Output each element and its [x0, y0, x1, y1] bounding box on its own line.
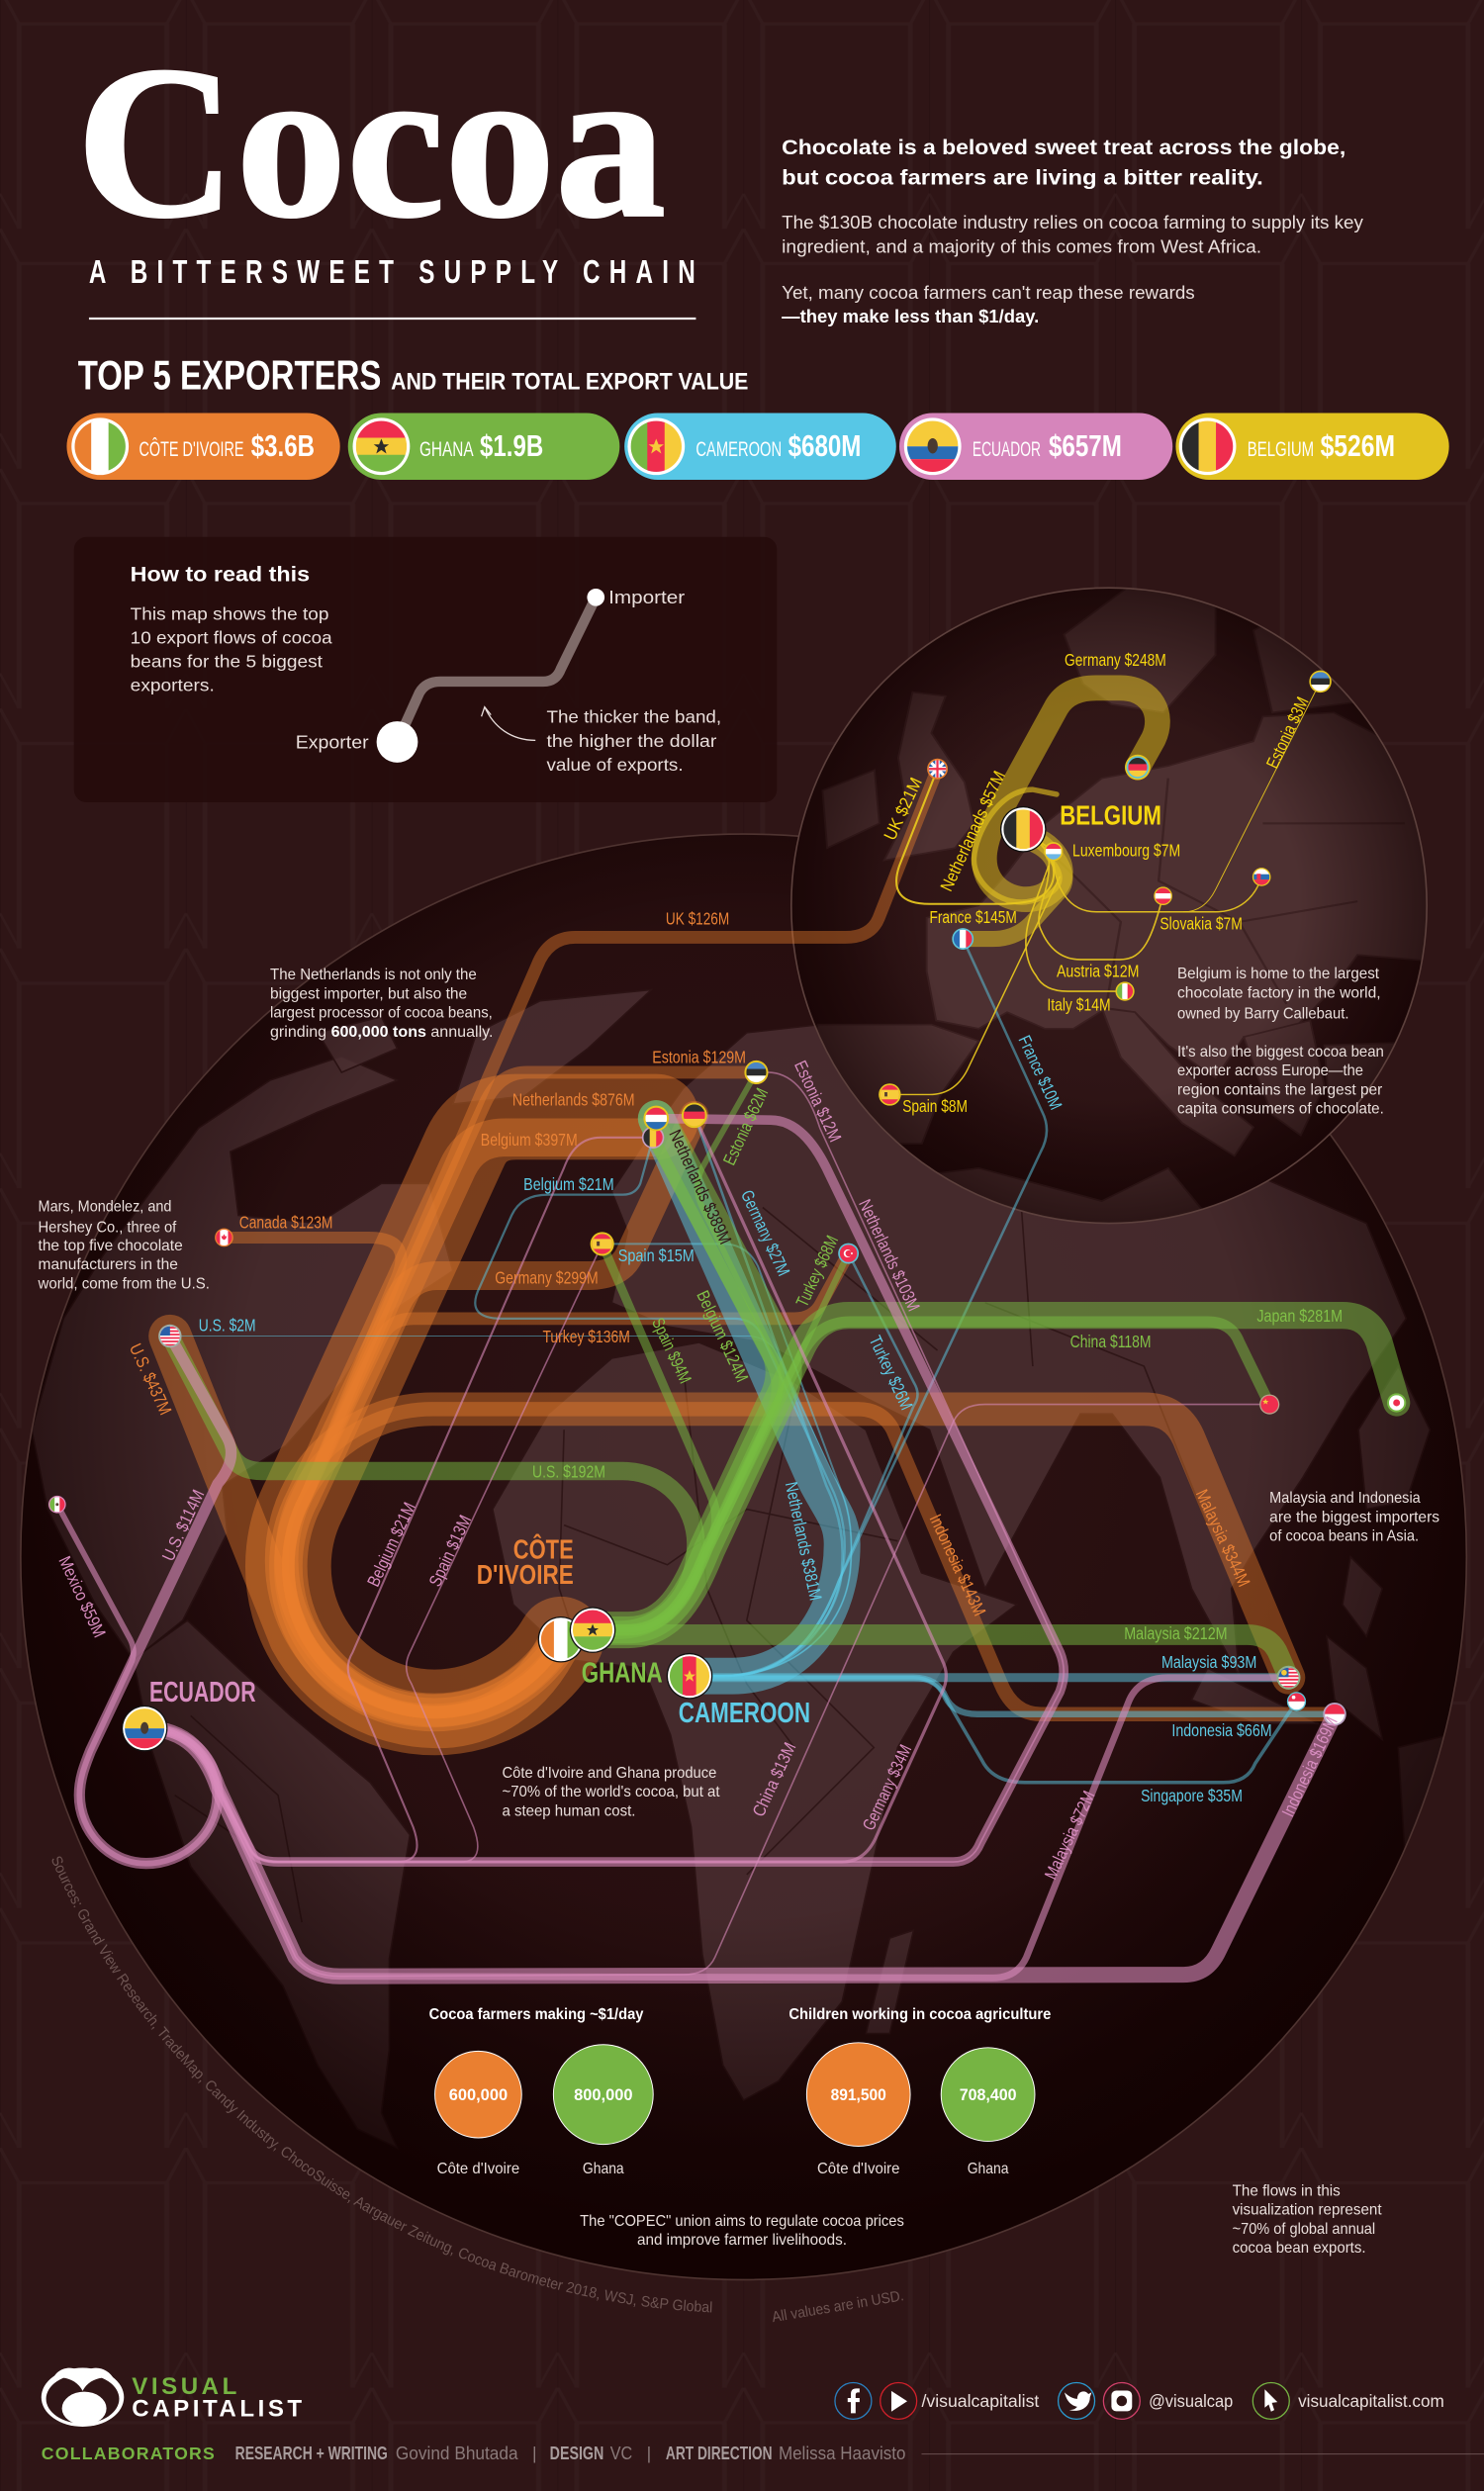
flow: Cameroon to Turkey [690, 1253, 917, 1676]
flow labels: Belgium inset: Estonia $3M [1262, 693, 1313, 772]
flag: Côte d'Ivoire exporter [538, 1616, 584, 1663]
exporter name labels: D'IVOIRE [477, 1559, 574, 1590]
flow labels: Ghana: Estonia $62M [719, 1085, 772, 1168]
flow: Belgium to Spain [889, 876, 1060, 1094]
flag: France inset [952, 928, 974, 950]
flags: importers in Europe inset [879, 671, 1332, 1106]
flow: Ghana to Japan [593, 1316, 1397, 1630]
callout: Netherlands note: The Netherlands is not only the [270, 966, 477, 983]
flow: Cameroon to Indonesia [690, 1678, 1335, 1714]
credits: COLLABORATORS [42, 2444, 215, 2463]
flow labels: Ecuador: Belgium $21M [363, 1499, 419, 1590]
flag: Luxembourg inset [1044, 842, 1063, 861]
subtitle: A BITTERSWEET SUPPLY CHAIN [89, 253, 696, 291]
flow: Ecuador to Netherlands [144, 1119, 1064, 1862]
sources curved text: Sources: Grand View Research, TradeMap, Candy Industry, ChocoSuisse, Aargauer Zeitung, Cocoa Barometer 2018, WSJ, S&P Global [51, 1856, 712, 2313]
pill: Cameroon: CAMEROON [696, 438, 782, 461]
pill: Belgium [1175, 414, 1449, 480]
flow labels: Ecuador: U.S. $114M [158, 1487, 208, 1564]
flow labels: Ecuador: China $13M [748, 1739, 800, 1819]
panel: how to read this: How to read this [131, 564, 310, 587]
flow labels: Ghana: Turkey $68M [792, 1233, 842, 1310]
flag: Belgium importer [642, 1127, 664, 1149]
callout: Asia note: of cocoa beans in Asia. [1269, 1527, 1419, 1545]
pill: Côte d'Ivoire [66, 414, 340, 480]
flag: UK inset [927, 759, 948, 780]
callout: COPEC note: and improve farmer livelihoods. [637, 2231, 847, 2249]
credits: RESEARCH + WRITING [235, 2443, 388, 2463]
flow: Ghana to U.S. [170, 1337, 696, 1630]
panel: how to read this: 10 export flows of cocoa [131, 627, 332, 647]
flow labels: Cameroon: Singapore $35M [1141, 1786, 1243, 1805]
callout: Belgium note: capita consumers of chocolate. [1177, 1100, 1384, 1118]
icon: youtube [881, 2382, 917, 2419]
legend band [397, 598, 596, 742]
flow labels: Belgium inset: Germany $248M [1065, 650, 1166, 670]
exporter name labels [149, 799, 1161, 1729]
flag: China importer [1259, 1394, 1279, 1415]
flag: Italy inset [1115, 981, 1135, 1001]
legend importer dot [587, 589, 604, 606]
flows: Belgium [889, 682, 1321, 1094]
logo: Visual Capitalist [42, 2368, 302, 2427]
intro text block: The $130B chocolate industry relies on cocoa farming to supply its key [782, 212, 1364, 232]
flow: CIV to Canada [224, 1238, 561, 1712]
flow labels: Cameroon: Germany $27M [737, 1187, 793, 1279]
flag: Canada importer [215, 1229, 233, 1246]
flow labels: Ghana: Belgium $124M [693, 1287, 752, 1385]
panel: how to read this: Exporter [296, 731, 369, 752]
flow labels: Belgium inset: Luxembourg $7M [1072, 841, 1180, 861]
flow labels: Ecuador: Estonia $12M [790, 1058, 845, 1145]
bubble: Côte d'Ivoire children: 891,500 [831, 2085, 886, 2104]
flow: Cameroon to U.S. [170, 1337, 852, 1676]
flow labels: Côte d'Ivoire: Germany $299M [495, 1268, 599, 1288]
flow labels: Ghana: Malaysia $212M [1124, 1623, 1228, 1643]
pill: Ecuador: ECUADOR [973, 438, 1041, 461]
flow labels: Belgium inset: Italy $14M [1047, 994, 1111, 1014]
flow: Ghana to Belgium [593, 1138, 778, 1630]
callout: coverage note [1233, 2181, 1382, 2257]
flow: Belgium to Italy [1026, 866, 1125, 991]
pill: Belgium: $526M [1321, 429, 1395, 463]
stats: cocoa farmers making about $1 a day [429, 2005, 653, 2177]
callout: U.S. manufacturers note: world, come from the U.S. [38, 1274, 210, 1292]
flow labels: Ghana: Netherlands $389M [665, 1127, 735, 1247]
pill: Ghana: GHANA [419, 438, 474, 461]
credits: ART DIRECTION [666, 2443, 773, 2463]
flow labels: Ecuador: Malaysia $72M [1041, 1788, 1099, 1883]
panel: how to read this: the higher the dollar [546, 731, 716, 751]
icon: instagram [1103, 2382, 1140, 2419]
flow labels: Cameroon: U.S. $2M [199, 1316, 256, 1336]
flow labels: Ghana [532, 1085, 1343, 1643]
flow: Ghana to Estonia [593, 1072, 782, 1630]
flag: Germany importer [682, 1102, 707, 1128]
flag: Indonesia importer [1323, 1703, 1346, 1725]
social links: visualcapitalist.com [1298, 2391, 1444, 2411]
flow: Cameroon to France [690, 939, 1047, 1676]
flow labels: Côte d'Ivoire: Canada $123M [239, 1212, 332, 1232]
callout: U.S. manufacturers note: manufacturers in the [39, 1255, 178, 1273]
flow: CIV to UK [288, 769, 938, 1712]
flow: CIV to Germany [288, 1115, 695, 1712]
flow: Ecuador to U.S. [79, 1337, 232, 1864]
zoomed globe: Europe [791, 586, 1452, 1250]
flow labels: Cameroon: Netherlands $381M [782, 1480, 826, 1603]
flow labels: Belgium inset: Slovakia $7M [1159, 913, 1243, 933]
flow labels: Belgium inset: Netherlanads $57M [936, 768, 1009, 894]
flow: Ecuador to Indonesia [144, 1714, 1335, 1977]
pill: Cameroon: $680M [788, 429, 861, 463]
flows: Ghana [170, 1072, 1397, 1678]
flag: Japan importer [1387, 1393, 1406, 1413]
callout: Netherlands note [270, 966, 493, 1041]
pill: Côte d'Ivoire: CÔTE D'IVOIRE [139, 438, 244, 461]
flow labels: Ecuador: Germany $34M [859, 1741, 915, 1833]
bubble: Côte d'Ivoire children [806, 2043, 910, 2147]
logo: Visual Capitalist: CAPITALIST [132, 2396, 302, 2423]
stats: cocoa farmers making about $1 a day: Ghana [583, 2160, 624, 2177]
flag: Turkey importer [838, 1244, 859, 1263]
flow labels: Cameroon [199, 1033, 1272, 1805]
social links: @visualcap [1149, 2391, 1233, 2411]
flow: Belgium to France [963, 834, 1065, 939]
flow: Ecuador to Mexico [57, 1505, 218, 1864]
credits [42, 2443, 1484, 2463]
intro text block: ingredient, and a majority of this comes from West Africa. [782, 235, 1261, 256]
flow: Ghana to Netherlands [593, 1119, 784, 1630]
intro text block: Chocolate is a beloved sweet treat across the globe, [782, 135, 1345, 159]
flag: Belgium exporter [1000, 806, 1047, 853]
flags: exporters [122, 1607, 712, 1751]
flag: Ghana exporter [570, 1607, 615, 1653]
flow labels: Ghana: China $118M [1070, 1332, 1152, 1351]
callout: West Africa note: a steep human cost. [502, 1802, 635, 1820]
exporter name labels: BELGIUM [1060, 799, 1161, 830]
legend exporter dot [377, 721, 417, 763]
panel: how to read this: exporters. [131, 676, 215, 695]
flow: Ecuador to Malaysia [144, 1678, 1288, 1978]
social links: /visualcapitalist [921, 2391, 1039, 2411]
bubble: Ghana children [941, 2048, 1035, 2142]
stats: cocoa farmers making about $1 a day: Cocoa farmers making ~$1/day [429, 2005, 643, 2023]
flow: Cameroon to Singapore [690, 1678, 1296, 1783]
heading: top 5 exporters: AND THEIR TOTAL EXPORT VALUE [391, 368, 748, 395]
flag: Slovakia inset [1252, 868, 1270, 886]
credits: Melissa Haavisto [779, 2443, 905, 2463]
stats: children working in cocoa agriculture: Ghana [968, 2160, 1009, 2177]
flow: Cameroon to Belgium [475, 1138, 845, 1676]
bubble: Ghana children: 708,400 [960, 2085, 1017, 2104]
flag: Spain importer [591, 1232, 614, 1255]
flow labels: Ecuador: Netherlands $103M [855, 1196, 924, 1314]
credits: | [647, 2444, 651, 2463]
stats: children working in cocoa agriculture: Children working in cocoa agriculture [788, 2005, 1051, 2023]
flow: Belgium to Slovakia [1054, 858, 1261, 912]
flow: Cameroon to Spain [603, 1244, 852, 1676]
flow labels: Cameroon: Indonesia $66M [1171, 1720, 1272, 1740]
flag: U.S. importer [158, 1325, 182, 1347]
panel: how to read this: This map shows the top [131, 603, 329, 623]
flows: Cameroon [170, 939, 1335, 1783]
heading: top 5 exporters: TOP 5 EXPORTERS [78, 351, 381, 398]
big globe [21, 834, 1470, 2279]
flow: CIV to Estonia [288, 1072, 756, 1712]
callout: Netherlands note: grinding 600,000 tons annually. [270, 1023, 493, 1041]
flow labels: Côte d'Ivoire: U.S. $437M [126, 1340, 176, 1418]
credits: | [532, 2444, 537, 2463]
note: all values in USD: All values are in USD. [771, 2287, 905, 2326]
callout: U.S. manufacturers note [38, 1197, 210, 1292]
flow: CIV to Indonesia [282, 1409, 1335, 1714]
flow labels: Ecuador [54, 1058, 1342, 1883]
callout: Asia note: are the biggest importers [1269, 1508, 1439, 1525]
heading: top 5 exporters [78, 351, 748, 398]
flow labels: Côte d'Ivoire: Estonia $129M [652, 1047, 746, 1066]
callout: Belgium note [1177, 965, 1384, 1118]
callout: Belgium note: region contains the largest per [1177, 1080, 1383, 1098]
stats: children working in cocoa agriculture [788, 2005, 1051, 2177]
flow labels: Côte d'Ivoire: Netherlands $876M [512, 1090, 635, 1110]
intro text block: Yet, many cocoa farmers can't reap these rewards [782, 282, 1195, 303]
bubble: Ghana farmers [553, 2045, 653, 2145]
flow labels: Côte d'Ivoire: UK $126M [666, 909, 729, 929]
panel: how to read this: value of exports. [546, 755, 684, 775]
flow labels: Belgium inset: Austria $12M [1057, 962, 1139, 981]
flow labels: Côte d'Ivoire: Indonesia $143M [926, 1512, 990, 1618]
pill: Ghana: $1.9B [480, 429, 543, 463]
pill: Ghana [348, 414, 619, 480]
flow: Belgium to Austria [1039, 858, 1163, 960]
flows: Côte d'Ivoire [170, 769, 1335, 1727]
flag: Malaysia importer [1276, 1666, 1301, 1690]
flow: Ecuador to Spain [144, 1244, 603, 1862]
pill: Belgium: BELGIUM [1248, 438, 1314, 461]
title: Cocoa [76, 22, 666, 263]
callout: Asia note: Malaysia and Indonesia [1269, 1489, 1421, 1507]
callout: coverage note: ~70% of global annual [1233, 2220, 1375, 2238]
flag: Estonia inset [1309, 671, 1332, 692]
exporter name labels: ECUADOR [149, 1677, 256, 1708]
panel: how to read this: The thicker the band, [546, 707, 721, 727]
flags: importers on the main map [48, 1061, 1406, 1725]
pill: Ecuador: $657M [1049, 429, 1122, 463]
callout: Netherlands note: largest processor of cocoa beans, [270, 1004, 493, 1022]
flag: Cameroon exporter [667, 1653, 712, 1699]
exporter name labels: CAMEROON [679, 1698, 810, 1729]
callout: Belgium note: chocolate factory in the world, [1177, 983, 1381, 1001]
flow: Ecuador to Estonia [144, 1072, 1064, 1862]
flow labels: Cameroon: France $10M [1015, 1033, 1067, 1113]
flag: Austria inset [1154, 886, 1172, 905]
flow: Belgium to Estonia [1183, 682, 1321, 912]
flow: Ecuador to Belgium [144, 1138, 653, 1862]
flag: Ecuador exporter [122, 1706, 167, 1751]
icon: twitter [1059, 2382, 1095, 2419]
flow labels: Cameroon: Turkey $26M [866, 1333, 917, 1413]
legend arrow [482, 707, 535, 740]
flows: Ecuador [57, 1072, 1335, 1978]
flag: Spain inset [879, 1083, 901, 1106]
flow labels: Côte d'Ivoire: Turkey $136M [542, 1327, 630, 1346]
callout: coverage note: The flows in this [1233, 2181, 1341, 2199]
flow: Ghana to Malaysia [593, 1634, 1288, 1678]
callout: West Africa note [502, 1764, 720, 1820]
flow labels: Ghana: Spain $94M [648, 1315, 696, 1386]
panel: how to read this: beans for the 5 biggest [131, 651, 323, 671]
callout: Belgium note: It's also the biggest cocoa bean [1177, 1043, 1384, 1061]
callout: Netherlands note: biggest importer, but also the [270, 984, 467, 1002]
flow labels: Côte d'Ivoire [126, 909, 1254, 1618]
pill: Côte d'Ivoire: $3.6B [251, 429, 315, 463]
flow labels: Ecuador: Mexico $59M [54, 1553, 110, 1640]
callout: coverage note: cocoa bean exports. [1233, 2239, 1366, 2257]
intro text block [782, 135, 1364, 326]
flow: Belgium to Luxembourg [1030, 834, 1054, 852]
exporter name labels: CÔTE [513, 1532, 574, 1564]
flow labels: Belgium inset: France $145M [930, 907, 1017, 927]
callout: Belgium note: owned by Barry Callebaut. [1177, 1004, 1348, 1022]
credits: Govind Bhutada [396, 2443, 518, 2463]
stats: children working in cocoa agriculture: Côte d'Ivoire [817, 2160, 900, 2177]
pill: Cameroon [624, 414, 896, 480]
callout: U.S. manufacturers note: the top five chocolate [39, 1237, 183, 1254]
flag: Germany inset [1125, 755, 1151, 780]
flow: CIV to Belgium [288, 1138, 653, 1712]
flow: Ecuador to China [144, 1405, 1269, 1977]
flow labels: Côte d'Ivoire: Belgium $397M [481, 1130, 578, 1150]
flow labels: Cameroon: Spain $15M [618, 1246, 695, 1265]
icon: facebook [835, 2382, 872, 2419]
flow labels: Cameroon: Belgium $21M [523, 1174, 614, 1194]
flow labels: Belgium inset [880, 650, 1313, 1116]
flow labels: Ghana: Japan $281M [1256, 1306, 1343, 1326]
callout: West Africa note: Côte d'Ivoire and Ghana produce [502, 1764, 716, 1782]
flow: CIV to U.S. [170, 1337, 561, 1727]
callout: U.S. manufacturers note: Hershey Co., three of [39, 1218, 177, 1236]
flag: Estonia importer [744, 1061, 768, 1084]
callout: U.S. manufacturers note: Mars, Mondelez, and [39, 1197, 171, 1215]
callout: COPEC note: The "COPEC" union aims to regulate cocoa prices [580, 2212, 904, 2230]
flow: Ecuador to Germany [144, 1115, 946, 1862]
flag: Mexico importer [48, 1496, 66, 1514]
pill: Ecuador [899, 414, 1172, 480]
stats: cocoa farmers making about $1 a day: Côte d'Ivoire [437, 2160, 519, 2177]
callout: Belgium note: Belgium is home to the largest [1177, 965, 1380, 982]
flow labels: Belgium inset: UK $21M [880, 775, 926, 843]
flow: Belgium to Germany [984, 688, 1158, 899]
flow labels: Ghana: U.S. $192M [532, 1461, 605, 1481]
flow labels: Ecuador: Indonesia $169M [1278, 1713, 1342, 1820]
callout: West Africa note: ~70% of the world's cocoa, but at [502, 1783, 720, 1800]
flow: Ghana to Turkey [593, 1253, 849, 1630]
flow: Belgium to UK [896, 769, 1054, 904]
callout: Asia note [1269, 1489, 1439, 1545]
bubble: Côte d'Ivoire farmers [435, 2051, 521, 2138]
credits: VC [610, 2443, 632, 2463]
flow: CIV to Netherlands [288, 1117, 656, 1712]
social links [835, 2382, 1444, 2419]
flow: CIV to Malaysia [282, 1409, 1288, 1710]
icon: website cursor [1252, 2382, 1289, 2419]
callout: Belgium note: exporter across Europe—the [1177, 1061, 1363, 1079]
intro text block: —they make less than $1/day. [782, 306, 1039, 326]
flag: Singapore importer [1287, 1692, 1306, 1711]
flow labels: Belgium inset: Spain $8M [902, 1096, 968, 1116]
flow: Cameroon to Netherlands [656, 1119, 842, 1676]
flow labels: Cameroon: Malaysia $93M [1161, 1652, 1256, 1672]
callout: coverage note: visualization represent [1233, 2201, 1382, 2219]
exporter name labels: GHANA [582, 1658, 663, 1690]
credits: DESIGN [550, 2443, 603, 2463]
flag: Netherlands importer [643, 1106, 669, 1131]
flow labels: Côte d'Ivoire: Malaysia $344M [1192, 1486, 1254, 1590]
flow: Belgium to Netherlands [974, 789, 1060, 902]
bubble: Côte d'Ivoire farmers: 600,000 [449, 2085, 508, 2104]
flow: Cameroon to Malaysia [690, 1675, 1288, 1681]
logo: Visual Capitalist: VISUAL [132, 2373, 236, 2400]
flow labels: Ecuador: Spain $13M [425, 1512, 475, 1590]
flow: Ghana to China [593, 1322, 1269, 1630]
flow: Ghana to Spain [593, 1244, 716, 1630]
flow: Cameroon to Germany [690, 1115, 843, 1676]
callout: COPEC note [580, 2212, 904, 2249]
intro text block: but cocoa farmers are living a bitter reality. [782, 164, 1263, 189]
panel: how to read this [74, 537, 777, 802]
panel: how to read this: Importer [608, 587, 685, 607]
flow: CIV to Turkey [288, 1253, 849, 1712]
bubble: Ghana farmers: 800,000 [574, 2085, 633, 2104]
